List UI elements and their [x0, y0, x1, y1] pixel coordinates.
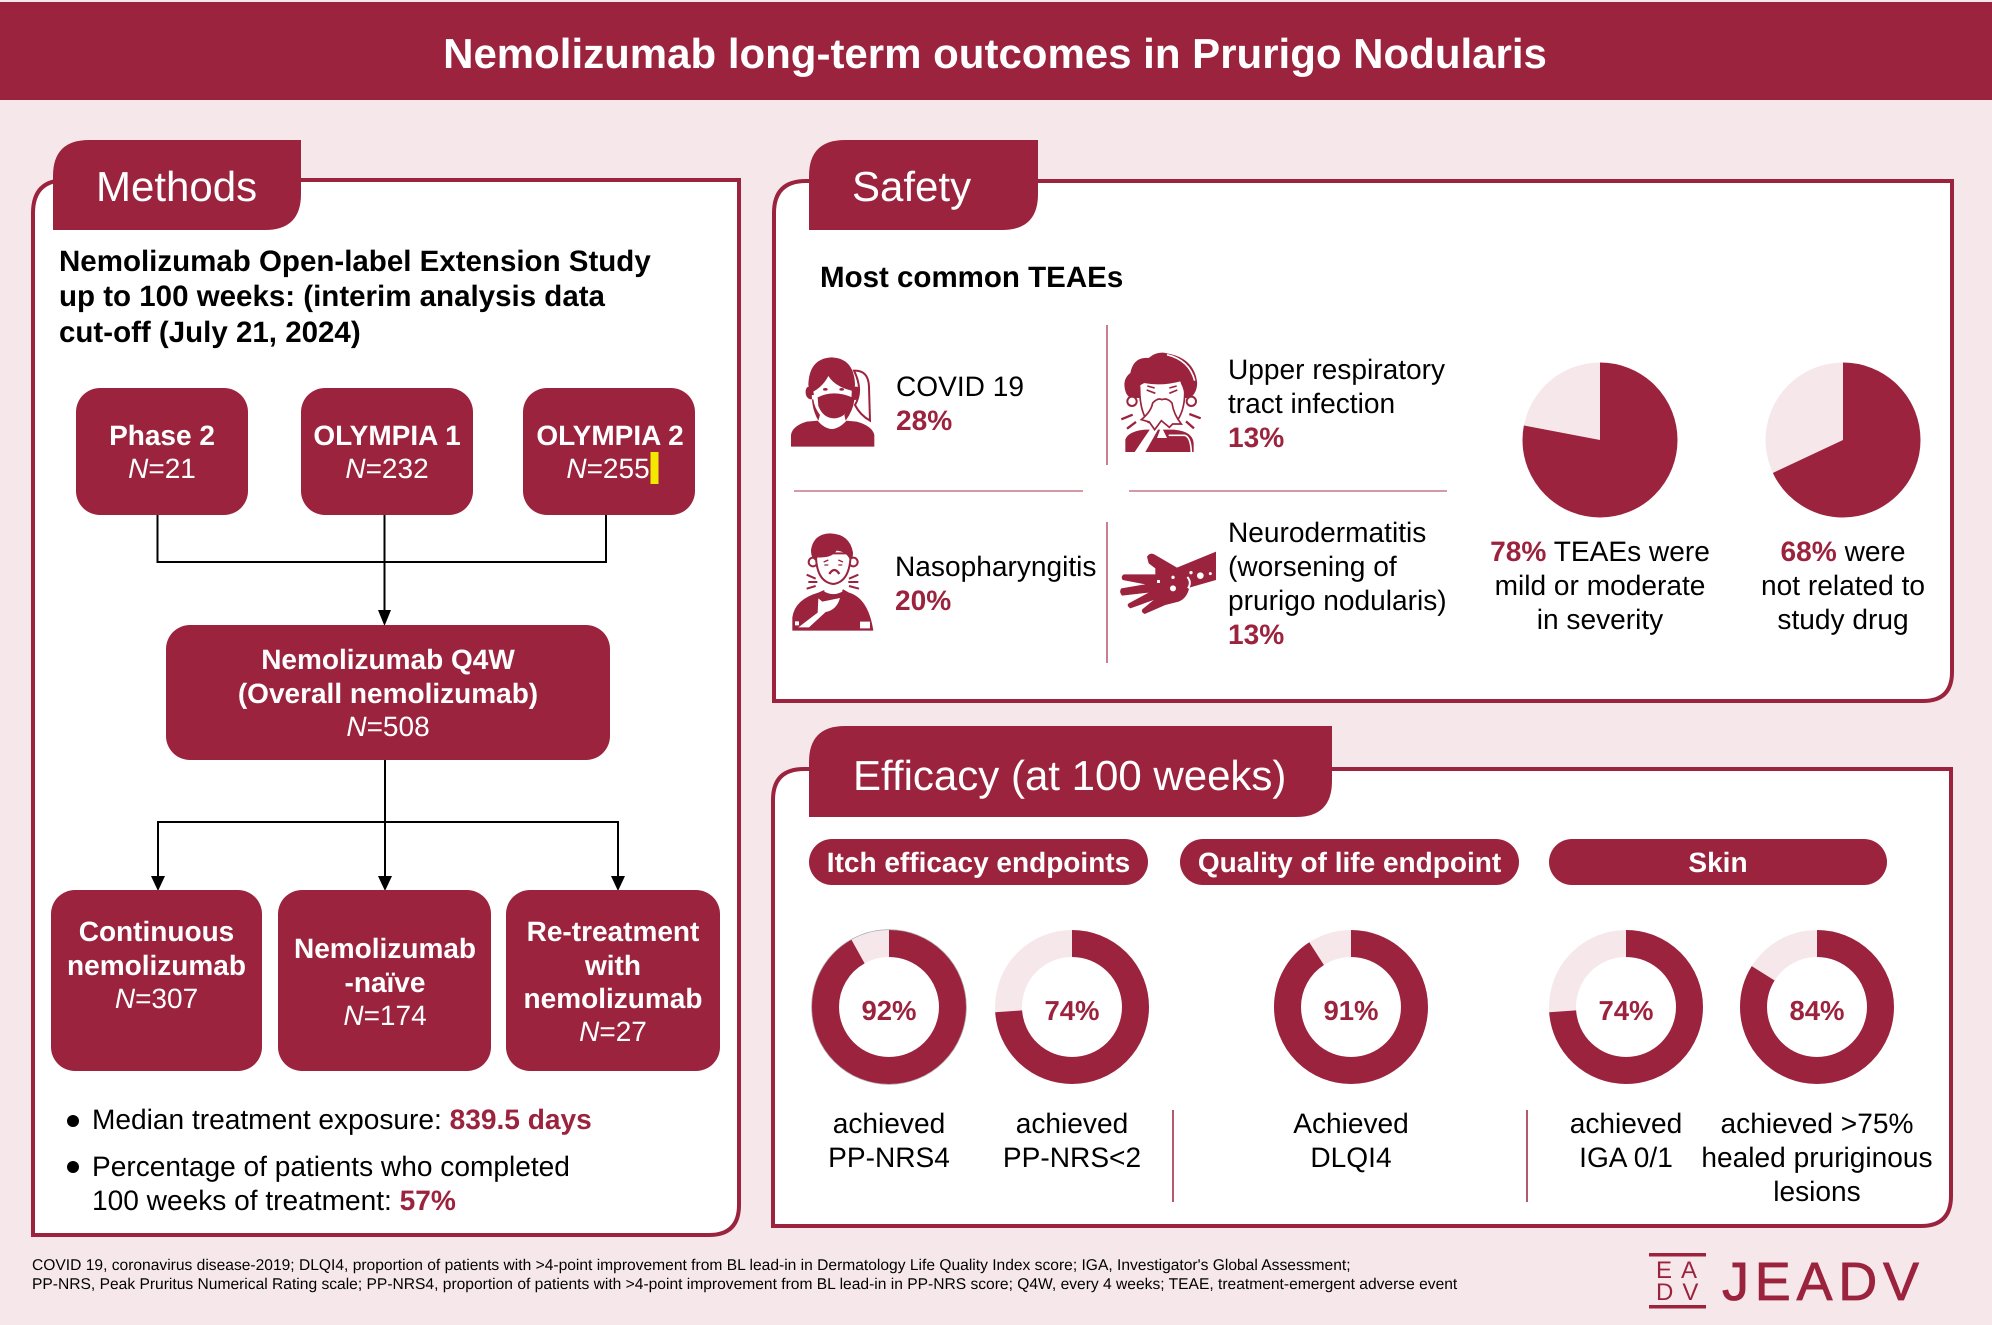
pill: itch efficacy endpoints: Itch efficacy endpoints	[827, 847, 1130, 878]
label: COVID 19: COVID 19	[896, 371, 1024, 402]
label: upper respiratory tract infection: tract infection	[1228, 388, 1395, 419]
box: continuous nemolizumab: Continuous	[79, 916, 234, 947]
label: PP-NRS4: achieved	[833, 1108, 945, 1139]
pill: quality of life endpoint	[1180, 839, 1519, 885]
pie chart label: 78%: in severity	[1537, 604, 1663, 635]
label: upper respiratory tract infection: 13%	[1228, 422, 1284, 453]
box: continuous nemolizumab: N=307	[115, 983, 198, 1014]
label: upper respiratory tract infection: Upper respiratory	[1228, 354, 1445, 385]
box: nemolizumab-naive: -naïve	[345, 967, 425, 998]
bullet: median exposure: Median treatment exposure: 839.5 days	[92, 1104, 592, 1135]
label: neurodermatitis: prurigo nodularis)	[1228, 585, 1447, 616]
box: nemolizumab-naive	[278, 890, 491, 1071]
box: nemolizumab-naive: N=174	[343, 1000, 427, 1031]
donut chart: 74% PP-NRS<2	[1008, 944, 1136, 1070]
box: Phase 2: N=21	[128, 453, 196, 484]
icon: person with sore throat	[792, 533, 873, 631]
label: neurodermatitis: Neurodermatitis	[1228, 517, 1426, 548]
label: PP-NRS<2: achieved	[1016, 1108, 1128, 1139]
label: healed pruriginous lesions: achieved >75%	[1721, 1108, 1913, 1139]
pie chart label: 78%: mild or moderate	[1495, 570, 1705, 601]
label: nasopharyngitis: Nasopharyngitis	[895, 551, 1096, 582]
box: OLYMPIA 1: OLYMPIA 1	[313, 420, 461, 451]
pie chart label: 68%: 68% were	[1781, 536, 1905, 567]
box: continuous nemolizumab: nemolizumab	[67, 950, 246, 981]
pill: itch efficacy endpoints	[809, 839, 1148, 885]
box: OLYMPIA 1: N=232	[345, 453, 429, 484]
donut chart: 74% IGA 0/1: 74%	[1598, 995, 1654, 1026]
label: DLQI4: Achieved	[1293, 1108, 1409, 1139]
pie chart: 78% mild or moderate	[1522, 362, 1678, 518]
logo: JEADV: EA	[1656, 1257, 1706, 1284]
label: neurodermatitis: (worsening of	[1228, 551, 1397, 582]
icon: hand and arm with skin lesions	[1120, 552, 1216, 614]
donut chart: 92% PP-NRS4: 92%	[861, 995, 917, 1026]
study description: Nemolizumab Open-label Extension Study	[59, 245, 651, 278]
box: OLYMPIA 2: N=255	[566, 453, 650, 484]
box: OLYMPIA 2	[523, 388, 695, 515]
bullet: completion: 57%	[400, 1185, 456, 1216]
study description: cut-off (July 21, 2024)	[59, 316, 361, 349]
donut chart: 84% healed lesions	[1754, 944, 1880, 1070]
methods heading tab	[53, 140, 301, 230]
panel: safety	[774, 140, 1952, 701]
pie chart label: 78%: 78% TEAEs were	[1490, 536, 1710, 567]
label: PP-NRS4: PP-NRS4	[828, 1142, 950, 1173]
panel: efficacy	[773, 726, 1951, 1226]
safety heading tab: Safety	[852, 163, 971, 210]
pie chart label: 68%: study drug	[1777, 604, 1909, 635]
box: continuous nemolizumab	[51, 890, 262, 1071]
box: re-treatment: Re-treatment	[527, 916, 699, 947]
label: IGA 0/1: IGA 0/1	[1579, 1142, 1673, 1173]
donut chart: 91% DLQI4: 91%	[1323, 995, 1379, 1026]
pie chart: 68% not related	[1766, 362, 1920, 518]
title banner	[0, 2, 1992, 100]
pie chart label: 68%: not related to	[1761, 570, 1925, 601]
logo: JEADV: DV	[1656, 1279, 1707, 1306]
bullet: completion: 100 weeks of treatment:	[92, 1185, 400, 1216]
box: OLYMPIA 2: OLYMPIA 2	[536, 420, 684, 451]
title banner: Nemolizumab long-term outcomes in Prurigo Nodularis	[443, 30, 1547, 77]
safety heading tab	[809, 140, 1038, 230]
footnote: PP-NRS, Peak Pruritus Numerical Rating scale; PP-NRS4, proportion of patients with >4-point improvement from BL lead-in in PP-NRS score; Q4W, every 4 weeks; TEAE, treatment-emergent adverse event	[32, 1276, 1458, 1293]
icon: woman with mask	[791, 357, 874, 447]
box: nemolizumab-naive: Nemolizumab	[294, 933, 476, 964]
box: OLYMPIA 1	[301, 388, 473, 515]
box: re-treatment	[506, 890, 720, 1071]
box: overall nemolizumab: (Overall nemolizumab)	[238, 678, 538, 709]
pill: quality of life endpoint: Quality of life endpoint	[1198, 847, 1501, 878]
donut chart: 74% PP-NRS<2: 74%	[1044, 995, 1100, 1026]
donut chart: 84% healed lesions: 84%	[1789, 995, 1845, 1026]
box: re-treatment: nemolizumab	[524, 983, 702, 1014]
label: PP-NRS<2: PP-NRS<2	[1003, 1142, 1141, 1173]
donut chart: 74% IGA 0/1	[1562, 944, 1690, 1070]
label: IGA 0/1: achieved	[1570, 1108, 1682, 1139]
footnote: COVID 19, coronavirus disease-2019; DLQI4, proportion of patients with >4-point improvement from BL lead-in in Dermatology Life Quality Index score; IGA, Investigator's Global Assessment;	[32, 1257, 1351, 1274]
box: overall nemolizumab: N=508	[346, 711, 430, 742]
donut chart: 92% PP-NRS4	[812, 930, 966, 1084]
flow connectors: studies to overall	[151, 514, 625, 891]
box: re-treatment: with	[584, 950, 641, 981]
pill: skin	[1549, 839, 1887, 885]
study description: up to 100 weeks: (interim analysis data	[59, 280, 606, 313]
bullet: completion	[67, 1151, 570, 1216]
panel: methods	[33, 140, 739, 1235]
label: DLQI4: DLQI4	[1310, 1142, 1392, 1173]
methods heading tab: Methods	[96, 163, 257, 210]
label: nasopharyngitis: 20%	[895, 585, 951, 616]
box: Phase 2: Phase 2	[109, 420, 215, 451]
icon: person sneezing with tissue	[1121, 353, 1201, 452]
label: neurodermatitis: 13%	[1228, 619, 1284, 650]
label: healed pruriginous lesions: lesions	[1773, 1176, 1861, 1207]
bullet: completion: Percentage of patients who completed	[92, 1151, 570, 1182]
label: healed pruriginous lesions: healed pruriginous	[1701, 1142, 1933, 1173]
label: COVID 19: 28%	[896, 405, 952, 436]
efficacy heading tab: Efficacy (at 100 weeks)	[853, 752, 1286, 799]
efficacy heading tab	[809, 726, 1332, 817]
most common TEAEs heading: Most common TEAEs	[820, 261, 1123, 294]
logo: JEADV: JEADV	[1722, 1252, 1919, 1312]
box: Phase 2	[76, 388, 248, 515]
box: re-treatment: N=27	[579, 1016, 647, 1047]
box: overall nemolizumab	[166, 625, 610, 760]
donut chart: 91% DLQI4	[1288, 944, 1414, 1070]
pill: skin: Skin	[1688, 847, 1748, 878]
box: overall nemolizumab: Nemolizumab Q4W	[261, 644, 515, 675]
